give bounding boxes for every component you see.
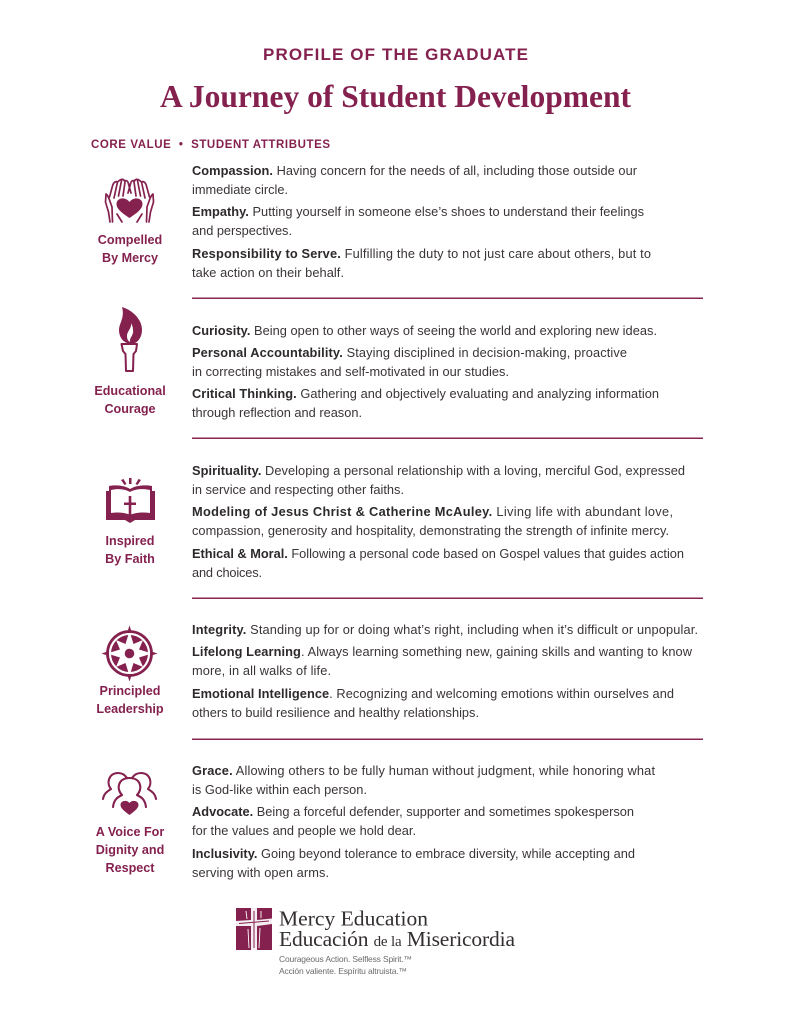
label: inspired by faith: By Faith: [105, 552, 155, 566]
attribute text: grace, advocate, inclusivity: Grace. Allowing others to be fully human without judgment, while honoring what: [192, 763, 655, 778]
attribute text: compassion, empathy, responsibility: immediate circle.: [192, 182, 288, 197]
label: a voice for dignity and respect: Dignity and: [96, 843, 164, 857]
label: principled leadership: Leadership: [96, 702, 164, 716]
logo wordmark: Mercy Education: [279, 906, 428, 930]
label: educational courage: Courage: [104, 402, 156, 416]
icon: open bible with cross: [106, 478, 155, 523]
icon: hands holding heart: [106, 179, 154, 222]
attribute text: integrity, lifelong learning, emotional intelligence: more, in all walks of life.: [192, 663, 331, 678]
panel: educational courage: [94, 307, 659, 420]
panel: compelled by mercy: [98, 163, 651, 280]
label: compelled by mercy: [98, 233, 162, 265]
attribute text: spirituality, modeling, ethical and moral: Ethical & Moral. Following a personal code based on Gospel values that guides action: [192, 546, 684, 561]
attribute text: integrity, lifelong learning, emotional intelligence: Integrity. Standing up for or doing what’s right, including when it’s difficult or unpopular.: [192, 622, 698, 637]
attribute text: curiosity, accountability, critical thinking: [192, 323, 659, 420]
attribute text: integrity, lifelong learning, emotional intelligence: Emotional Intelligence. Recognizing and welcoming emotions within ourselves and: [192, 686, 674, 701]
attribute text: compassion, empathy, responsibility: Responsibility to Serve. Fulfilling the duty to not just care about others, but to: [192, 246, 651, 261]
label: inspired by faith: Inspired: [106, 534, 154, 548]
label: principled leadership: Principled: [100, 684, 160, 698]
attribute text: curiosity, accountability, critical thinking: in correcting mistakes and self-motivated in our studies.: [192, 364, 509, 379]
attribute text: integrity, lifelong learning, emotional intelligence: Lifelong Learning. Always learning something new, gaining skills and wanting to know: [192, 644, 693, 659]
panel: inspired by faith: [105, 463, 685, 580]
attribute text: compassion, empathy, responsibility: and perspectives.: [192, 223, 292, 238]
attribute text: grace, advocate, inclusivity: is God-like within each person.: [192, 782, 367, 797]
attribute text: grace, advocate, inclusivity: Inclusivity. Going beyond tolerance to embrace diversity, while accepting and: [192, 846, 635, 861]
attribute text: spirituality, modeling, ethical and moral: [192, 463, 685, 580]
label: compelled by mercy: By Mercy: [102, 251, 158, 265]
attribute text: curiosity, accountability, critical thinking: through reflection and reason.: [192, 405, 362, 420]
label: compelled by mercy: Compelled: [98, 233, 162, 247]
label: a voice for dignity and respect: Respect: [106, 861, 155, 875]
label: principled leadership: [96, 684, 164, 716]
attribute text: integrity, lifelong learning, emotional intelligence: [192, 622, 698, 720]
attribute text: grace, advocate, inclusivity: [192, 763, 655, 880]
logo: mercy education: [236, 906, 515, 976]
logo: mercy education: Acción valiente. Espíritu altruista.™: [279, 966, 407, 976]
label: educational courage: [94, 384, 166, 416]
attribute text: curiosity, accountability, critical thinking: Personal Accountability. Staying disciplined in decision-making, proactive: [192, 345, 627, 360]
attribute text: compassion, empathy, responsibility: Compassion. Having concern for the needs of all, including those outside our: [192, 163, 638, 178]
attribute text: compassion, empathy, responsibility: take action on their behalf.: [192, 265, 344, 280]
attribute text: spirituality, modeling, ethical and moral: Spirituality. Developing a personal relationship with a loving, merciful God, expressed: [192, 463, 685, 478]
attribute text: integrity, lifelong learning, emotional intelligence: others to build resilience and healthy relationships.: [192, 705, 479, 720]
label: inspired by faith: [105, 534, 155, 566]
attribute text: curiosity, accountability, critical thinking: Critical Thinking. Gathering and objectively evaluating and analyzing information: [192, 386, 659, 401]
column header: CORE VALUE • STUDENT ATTRIBUTES: [91, 139, 330, 151]
attribute text: spirituality, modeling, ethical and moral: compassion, generosity and hospitality, demonstrating the strength of infinite mercy.: [192, 523, 669, 538]
attribute text: spirituality, modeling, ethical and moral: and choices.: [192, 565, 262, 580]
attribute text: spirituality, modeling, ethical and moral: Modeling of Jesus Christ & Catherine McAuley. Living life with abundant love,: [192, 504, 673, 519]
logo tagline: Courageous Action. Selfless Spirit.™: [279, 954, 412, 964]
logo mark: cross: [236, 908, 272, 950]
attribute text: curiosity, accountability, critical thinking: Curiosity. Being open to other ways of seeing the world and exploring new ideas.: [192, 323, 657, 338]
attribute text: compassion, empathy, responsibility: Empathy. Putting yourself in someone else’s shoes to understand their feelings: [192, 204, 644, 219]
label: a voice for dignity and respect: [96, 825, 164, 875]
attribute text: compassion, empathy, responsibility: [192, 163, 651, 280]
panel: principled leadership: [96, 622, 698, 720]
logo: mercy education: Educación de la Misericordia: [279, 927, 515, 951]
title: profile of the graduate: PROFILE OF THE GRADUATE: [263, 45, 528, 64]
icon: torch: [119, 307, 142, 371]
attribute text: grace, advocate, inclusivity: Advocate. Being a forceful defender, supporter and sometimes spokesperson: [192, 804, 634, 819]
attribute text: spirituality, modeling, ethical and moral: in service and respecting other faiths.: [192, 482, 404, 497]
icon: compass rose: [102, 626, 158, 682]
panel: a voice for dignity and respect: [96, 763, 655, 880]
attribute text: grace, advocate, inclusivity: for the values and people we hold dear.: [192, 823, 416, 838]
heading: a journey of student development: A Journey of Student Development: [160, 79, 632, 114]
attribute text: grace, advocate, inclusivity: serving with open arms.: [192, 865, 329, 880]
label: a voice for dignity and respect: A Voice For: [96, 825, 164, 839]
icon: people with heart: [103, 773, 156, 815]
label: educational courage: Educational: [94, 384, 166, 398]
